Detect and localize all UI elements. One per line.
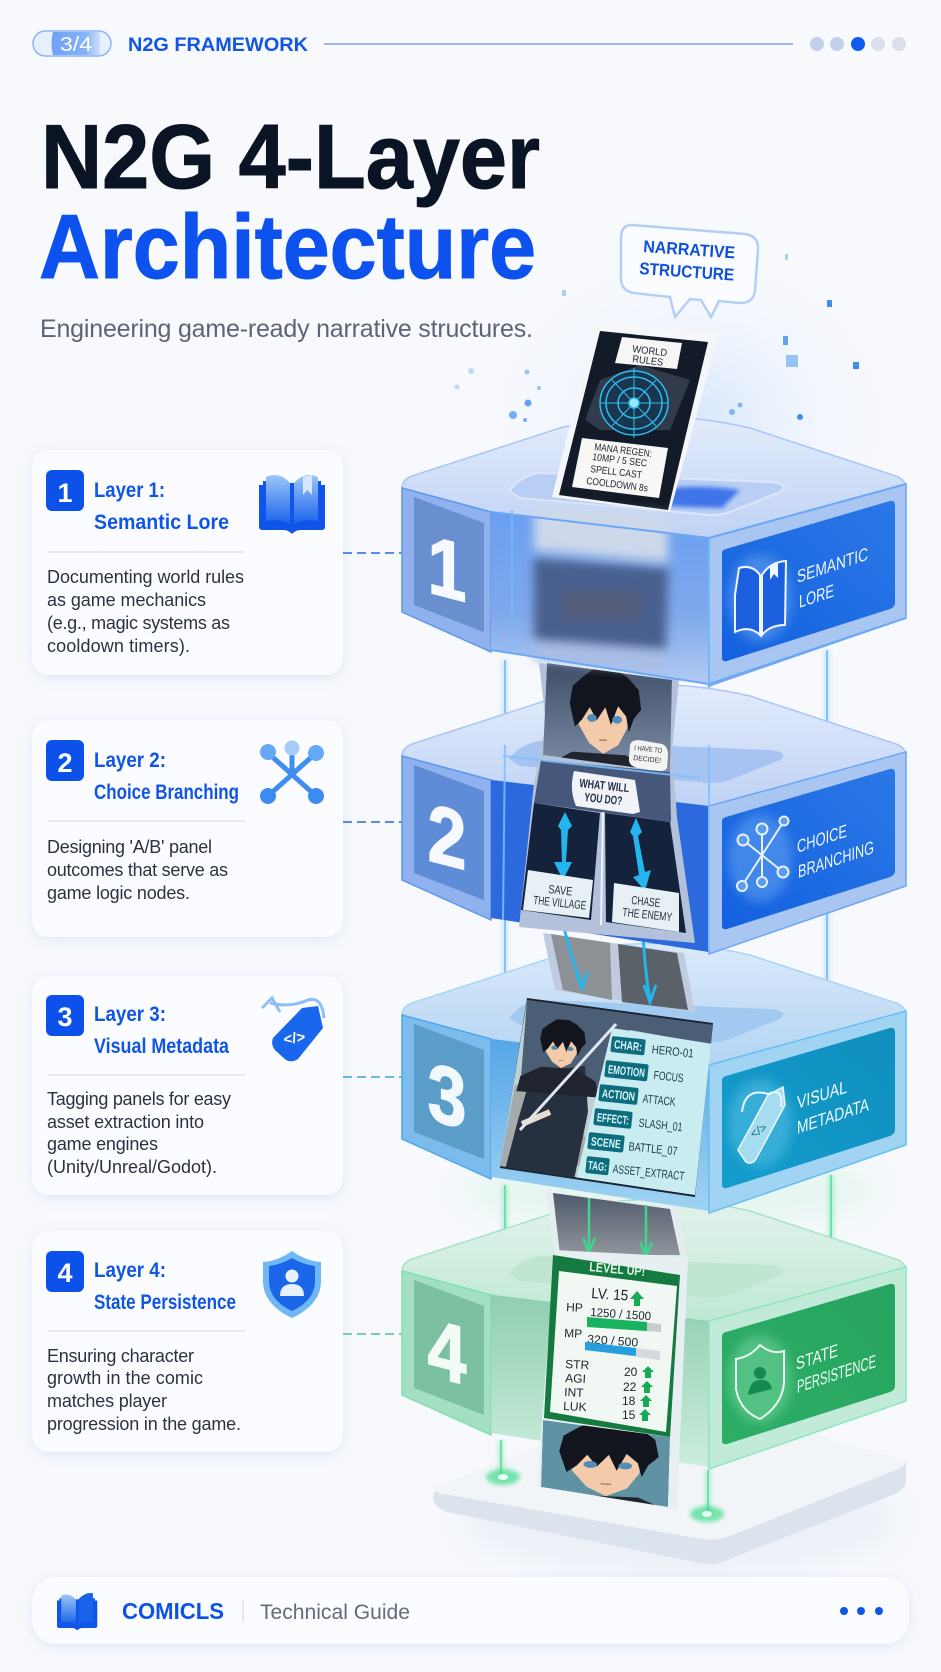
subtitle: Engineering game-ready narrative structures.	[40, 315, 533, 343]
mana box: MANA REGEN:	[594, 442, 653, 460]
connector lines	[343, 553, 404, 1334]
level stats: HP	[566, 1300, 583, 1315]
card 3: visual metadata	[32, 976, 343, 1195]
title: N2G 4-Layer	[41, 107, 540, 208]
card 2 body: outcomes that serve as	[47, 860, 228, 880]
hero portrait	[541, 1420, 670, 1507]
magic circle	[600, 368, 668, 438]
number 1: 1	[428, 519, 466, 620]
level stats: LV. 15	[591, 1285, 629, 1305]
metadata rows: SLASH_01	[638, 1116, 683, 1134]
footer bar	[32, 1577, 909, 1644]
card 4 body	[47, 1346, 241, 1434]
level stats: 1250 / 1500	[590, 1305, 652, 1323]
label: visual metadata: </>	[748, 1120, 770, 1141]
title: Architecture	[39, 197, 536, 298]
badge 2	[46, 740, 84, 781]
level stats: 22	[623, 1380, 637, 1394]
comic strip: world rules	[552, 323, 719, 512]
layer 1 block	[402, 416, 906, 540]
choice b box	[612, 883, 679, 932]
card 3 body: asset extraction into	[47, 1112, 204, 1132]
card 1 heading: Layer 1:	[94, 479, 165, 502]
world rules box	[615, 337, 682, 369]
card 4 heading	[94, 1259, 236, 1314]
mana box: COOLDOWN 8s	[586, 476, 649, 495]
level stats: LUK	[563, 1399, 587, 1414]
card 2 body	[47, 837, 228, 903]
card 2 heading	[94, 749, 239, 804]
card 1 heading: Semantic Lore	[94, 511, 229, 534]
header bar	[33, 31, 906, 56]
choice a box: THE VILLAGE	[533, 893, 587, 913]
level stats: AGI	[565, 1371, 586, 1386]
label: choice branching: CHOICE	[797, 820, 847, 857]
card 4 body: progression in the game.	[47, 1414, 241, 1434]
small speech bubble: DECIDE!	[633, 755, 661, 765]
card 4 body: growth in the comic	[47, 1368, 203, 1388]
footer dots	[840, 1607, 883, 1615]
badge 3	[46, 995, 84, 1036]
world rules box: RULES	[632, 354, 664, 369]
metadata rows: ATTACK	[642, 1092, 676, 1109]
badge 4	[46, 1251, 84, 1292]
badge 2: 2	[57, 748, 73, 778]
narrative structure bubble: NARRATIVE	[643, 237, 736, 262]
metadata rows: SCENE	[590, 1134, 622, 1151]
card 3 heading: Visual Metadata	[94, 1035, 229, 1058]
comic strip: choice panels	[503, 663, 709, 950]
label: state persistence: PERSISTENCE	[797, 1350, 876, 1397]
card 4 body: Ensuring character	[47, 1346, 194, 1366]
card 4 body: matches player	[47, 1391, 167, 1411]
label: semantic lore	[728, 543, 868, 642]
small speech bubble: I HAVE TO	[634, 745, 663, 755]
level stats: MP	[564, 1326, 583, 1341]
level stats: 15	[622, 1408, 636, 1422]
narrative structure bubble	[621, 225, 758, 317]
portrait panel	[543, 663, 672, 772]
badge 1: 1	[57, 478, 73, 508]
level stats: 20	[624, 1365, 638, 1379]
number 3: 3	[428, 1046, 466, 1147]
number 4: 4	[428, 1302, 466, 1403]
number 2: 2	[428, 787, 466, 888]
icon: code tag	[262, 998, 324, 1061]
metadata rows: CHAR:	[613, 1037, 643, 1054]
card 3 body: Tagging panels for easy	[47, 1089, 231, 1109]
card 2 heading: Layer 2:	[94, 749, 166, 772]
progress dots	[810, 37, 906, 51]
choice panel b	[605, 813, 686, 933]
card 3 heading: Layer 3:	[94, 1003, 166, 1026]
page pill	[33, 31, 111, 56]
choice b box: CHASE	[631, 893, 661, 910]
icon: branching nodes	[260, 740, 324, 804]
icon: shield	[263, 1251, 321, 1318]
data particles	[454, 254, 859, 422]
world rules box: WORLD	[632, 344, 668, 359]
label: state persistence	[728, 1335, 876, 1423]
icon: code tag: </>	[282, 1029, 307, 1048]
choice b box: THE ENEMY	[622, 905, 673, 924]
metadata rows: BATTLE_07	[628, 1139, 678, 1158]
level up title: LEVEL UP!	[589, 1259, 646, 1279]
label: choice branching	[728, 814, 874, 902]
metadata rows: TAG:	[587, 1158, 608, 1174]
metadata rows: HERO-01	[651, 1042, 695, 1061]
label: semantic lore: LORE	[799, 580, 834, 612]
card 2 heading: Choice Branching	[94, 781, 239, 804]
card 3 body: (Unity/Unreal/Godot).	[47, 1157, 217, 1177]
card 1 body: Documenting world rules	[47, 567, 244, 587]
card 1 body	[47, 567, 244, 656]
rock panel	[546, 1192, 687, 1256]
badge 4: 4	[57, 1258, 73, 1288]
card 1 heading	[94, 479, 229, 534]
choice a box: SAVE	[548, 882, 573, 898]
metadata rows	[585, 1036, 695, 1183]
card 3 body	[47, 1089, 231, 1177]
card 2: choice branching	[32, 720, 343, 937]
card 4: state persistence	[32, 1231, 343, 1452]
footer brand: COMICLS	[122, 1598, 224, 1624]
label: semantic lore: SEMANTIC	[797, 543, 868, 587]
label: visual metadata: VISUAL	[797, 1076, 847, 1113]
metadata rows: FOCUS	[653, 1068, 684, 1085]
card 2 body: game logic nodes.	[47, 883, 190, 903]
comic strip: level up	[537, 1192, 688, 1510]
metadata rows: ASSET_EXTRACT	[612, 1162, 686, 1183]
base glow nodes	[486, 1469, 724, 1522]
title	[39, 107, 540, 298]
label: visual metadata	[728, 1076, 870, 1167]
header label: N2G FRAMEWORK	[128, 35, 308, 56]
base platform	[433, 1430, 906, 1564]
comic card: metadata tags	[500, 998, 713, 1197]
badge 1	[46, 470, 84, 511]
card 3 heading	[94, 1003, 229, 1058]
blurred comic strip	[534, 505, 668, 672]
comic strip: branch continuation	[543, 917, 695, 1013]
small speech bubble	[629, 740, 668, 771]
level stats: INT	[564, 1385, 585, 1400]
layer 1 block front	[402, 484, 906, 686]
label: state persistence: STATE	[796, 1340, 838, 1374]
badge 3: 3	[57, 1002, 73, 1032]
level stats: STR	[565, 1357, 590, 1372]
question bubble: YOU DO?	[584, 790, 623, 808]
mana box: SPELL CAST	[590, 464, 643, 481]
card 4 heading: State Persistence	[94, 1291, 236, 1314]
metadata rows: ACTION	[601, 1086, 636, 1104]
card 3 body: game engines	[47, 1134, 158, 1154]
metadata rows: EFFECT:	[596, 1110, 630, 1128]
mana box	[572, 438, 668, 498]
layer 4 block	[402, 1200, 906, 1469]
level stats: 320 / 500	[587, 1332, 639, 1350]
metadata rows: EMOTION	[607, 1062, 646, 1080]
page pill: 3/4	[60, 34, 92, 56]
question bubble: WHAT WILL	[579, 776, 630, 795]
level stats: 18	[622, 1394, 636, 1408]
icon: book	[259, 475, 325, 534]
translucent frame bands	[503, 745, 709, 950]
card 1 body: as game mechanics	[47, 590, 206, 610]
card 4 heading: Layer 4:	[94, 1259, 166, 1282]
card 1: semantic lore	[32, 450, 343, 675]
choice panel a	[521, 803, 600, 920]
cyan arrows	[554, 812, 651, 891]
card 1 body: cooldown timers).	[47, 636, 190, 656]
hero figure	[505, 1017, 616, 1180]
mana box: 10MP / 5 SEC	[592, 452, 648, 470]
question bubble	[572, 771, 640, 814]
choice a box	[523, 870, 593, 918]
footer guide label: Technical Guide	[260, 1600, 410, 1624]
label: choice branching: BRANCHING	[798, 836, 874, 882]
footer book icon	[57, 1593, 97, 1630]
layer 2 block	[402, 684, 906, 954]
layer 3 block	[402, 944, 906, 1213]
card 1 body: (e.g., magic systems as	[47, 613, 230, 633]
glow pillars	[501, 650, 831, 1514]
level stats	[563, 1285, 661, 1422]
card 2 body: Designing 'A/B' panel	[47, 837, 212, 857]
narrative structure bubble: STRUCTURE	[639, 259, 735, 285]
background glow	[460, 240, 910, 1580]
label: visual metadata: METADATA	[797, 1094, 870, 1138]
